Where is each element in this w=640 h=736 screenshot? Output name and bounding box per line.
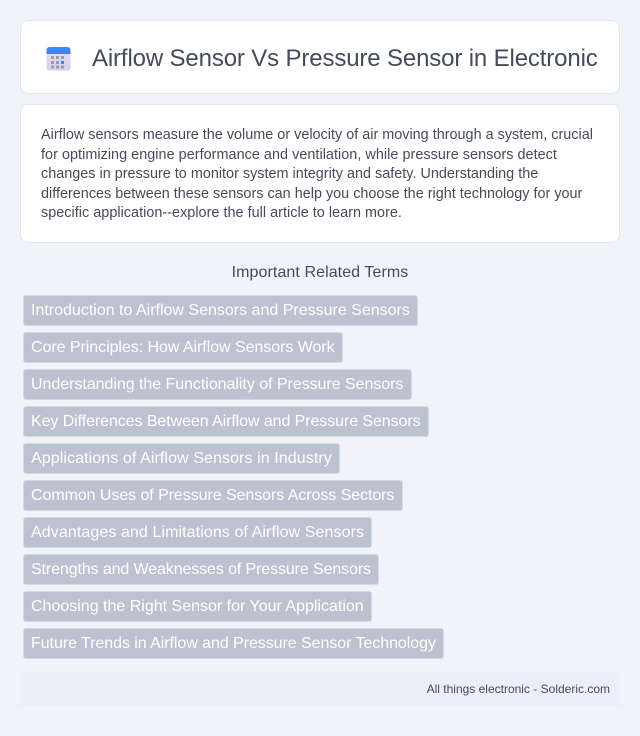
term tag: Strengths and Weaknesses of Pressure Sensors: [31, 561, 371, 578]
intro paragraph: [41, 127, 593, 221]
term tag: [23, 443, 340, 474]
term tag: [23, 406, 429, 437]
term tag: Introduction to Airflow Sensors and Pressure Sensors: [31, 302, 410, 319]
icon: calendar grid: [46, 47, 70, 70]
footer bar: [20, 672, 620, 706]
intro paragraph: Airflow sensors measure the volume or velocity of air moving through a system, crucial: [41, 127, 593, 143]
footer credit: All things electronic - Solderic.com: [427, 682, 610, 696]
panel: intro text: [20, 104, 620, 243]
term tag: [23, 332, 343, 363]
list of related terms: [23, 295, 444, 659]
term tag: [23, 480, 403, 511]
heading: important related terms: Important Related Terms: [232, 264, 408, 281]
intro paragraph: differences between these sensors can help you choose the right technology for your: [41, 186, 582, 202]
term tag: [23, 628, 444, 659]
term tag: [23, 591, 372, 622]
term tag: Key Differences Between Airflow and Pressure Sensors: [31, 413, 421, 430]
term tag: [23, 517, 372, 548]
term tag: Applications of Airflow Sensors in Industry: [31, 450, 332, 467]
intro paragraph: for optimizing engine performance and ventilation, while pressure sensors detect: [41, 146, 557, 162]
term tag: Advantages and Limitations of Airflow Sensors: [31, 524, 364, 541]
term tag: Choosing the Right Sensor for Your Application: [31, 598, 364, 615]
term tag: Core Principles: How Airflow Sensors Work: [31, 339, 335, 356]
intro paragraph: specific application--explore the full article to learn more.: [41, 205, 402, 221]
term tag: Understanding the Functionality of Pressure Sensors: [31, 376, 403, 393]
term tag: Common Uses of Pressure Sensors Across Sectors: [31, 487, 394, 504]
intro paragraph: changes in pressure to monitor system integrity and safety. Understanding the: [41, 166, 538, 182]
term tag: [23, 369, 412, 400]
title: Airflow Sensor Vs Pressure Sensor in Electronic: [92, 45, 598, 72]
panel: header: [20, 20, 620, 94]
term tag: [23, 554, 379, 585]
term tag: Future Trends in Airflow and Pressure Sensor Technology: [31, 635, 436, 652]
term tag: [23, 295, 418, 326]
